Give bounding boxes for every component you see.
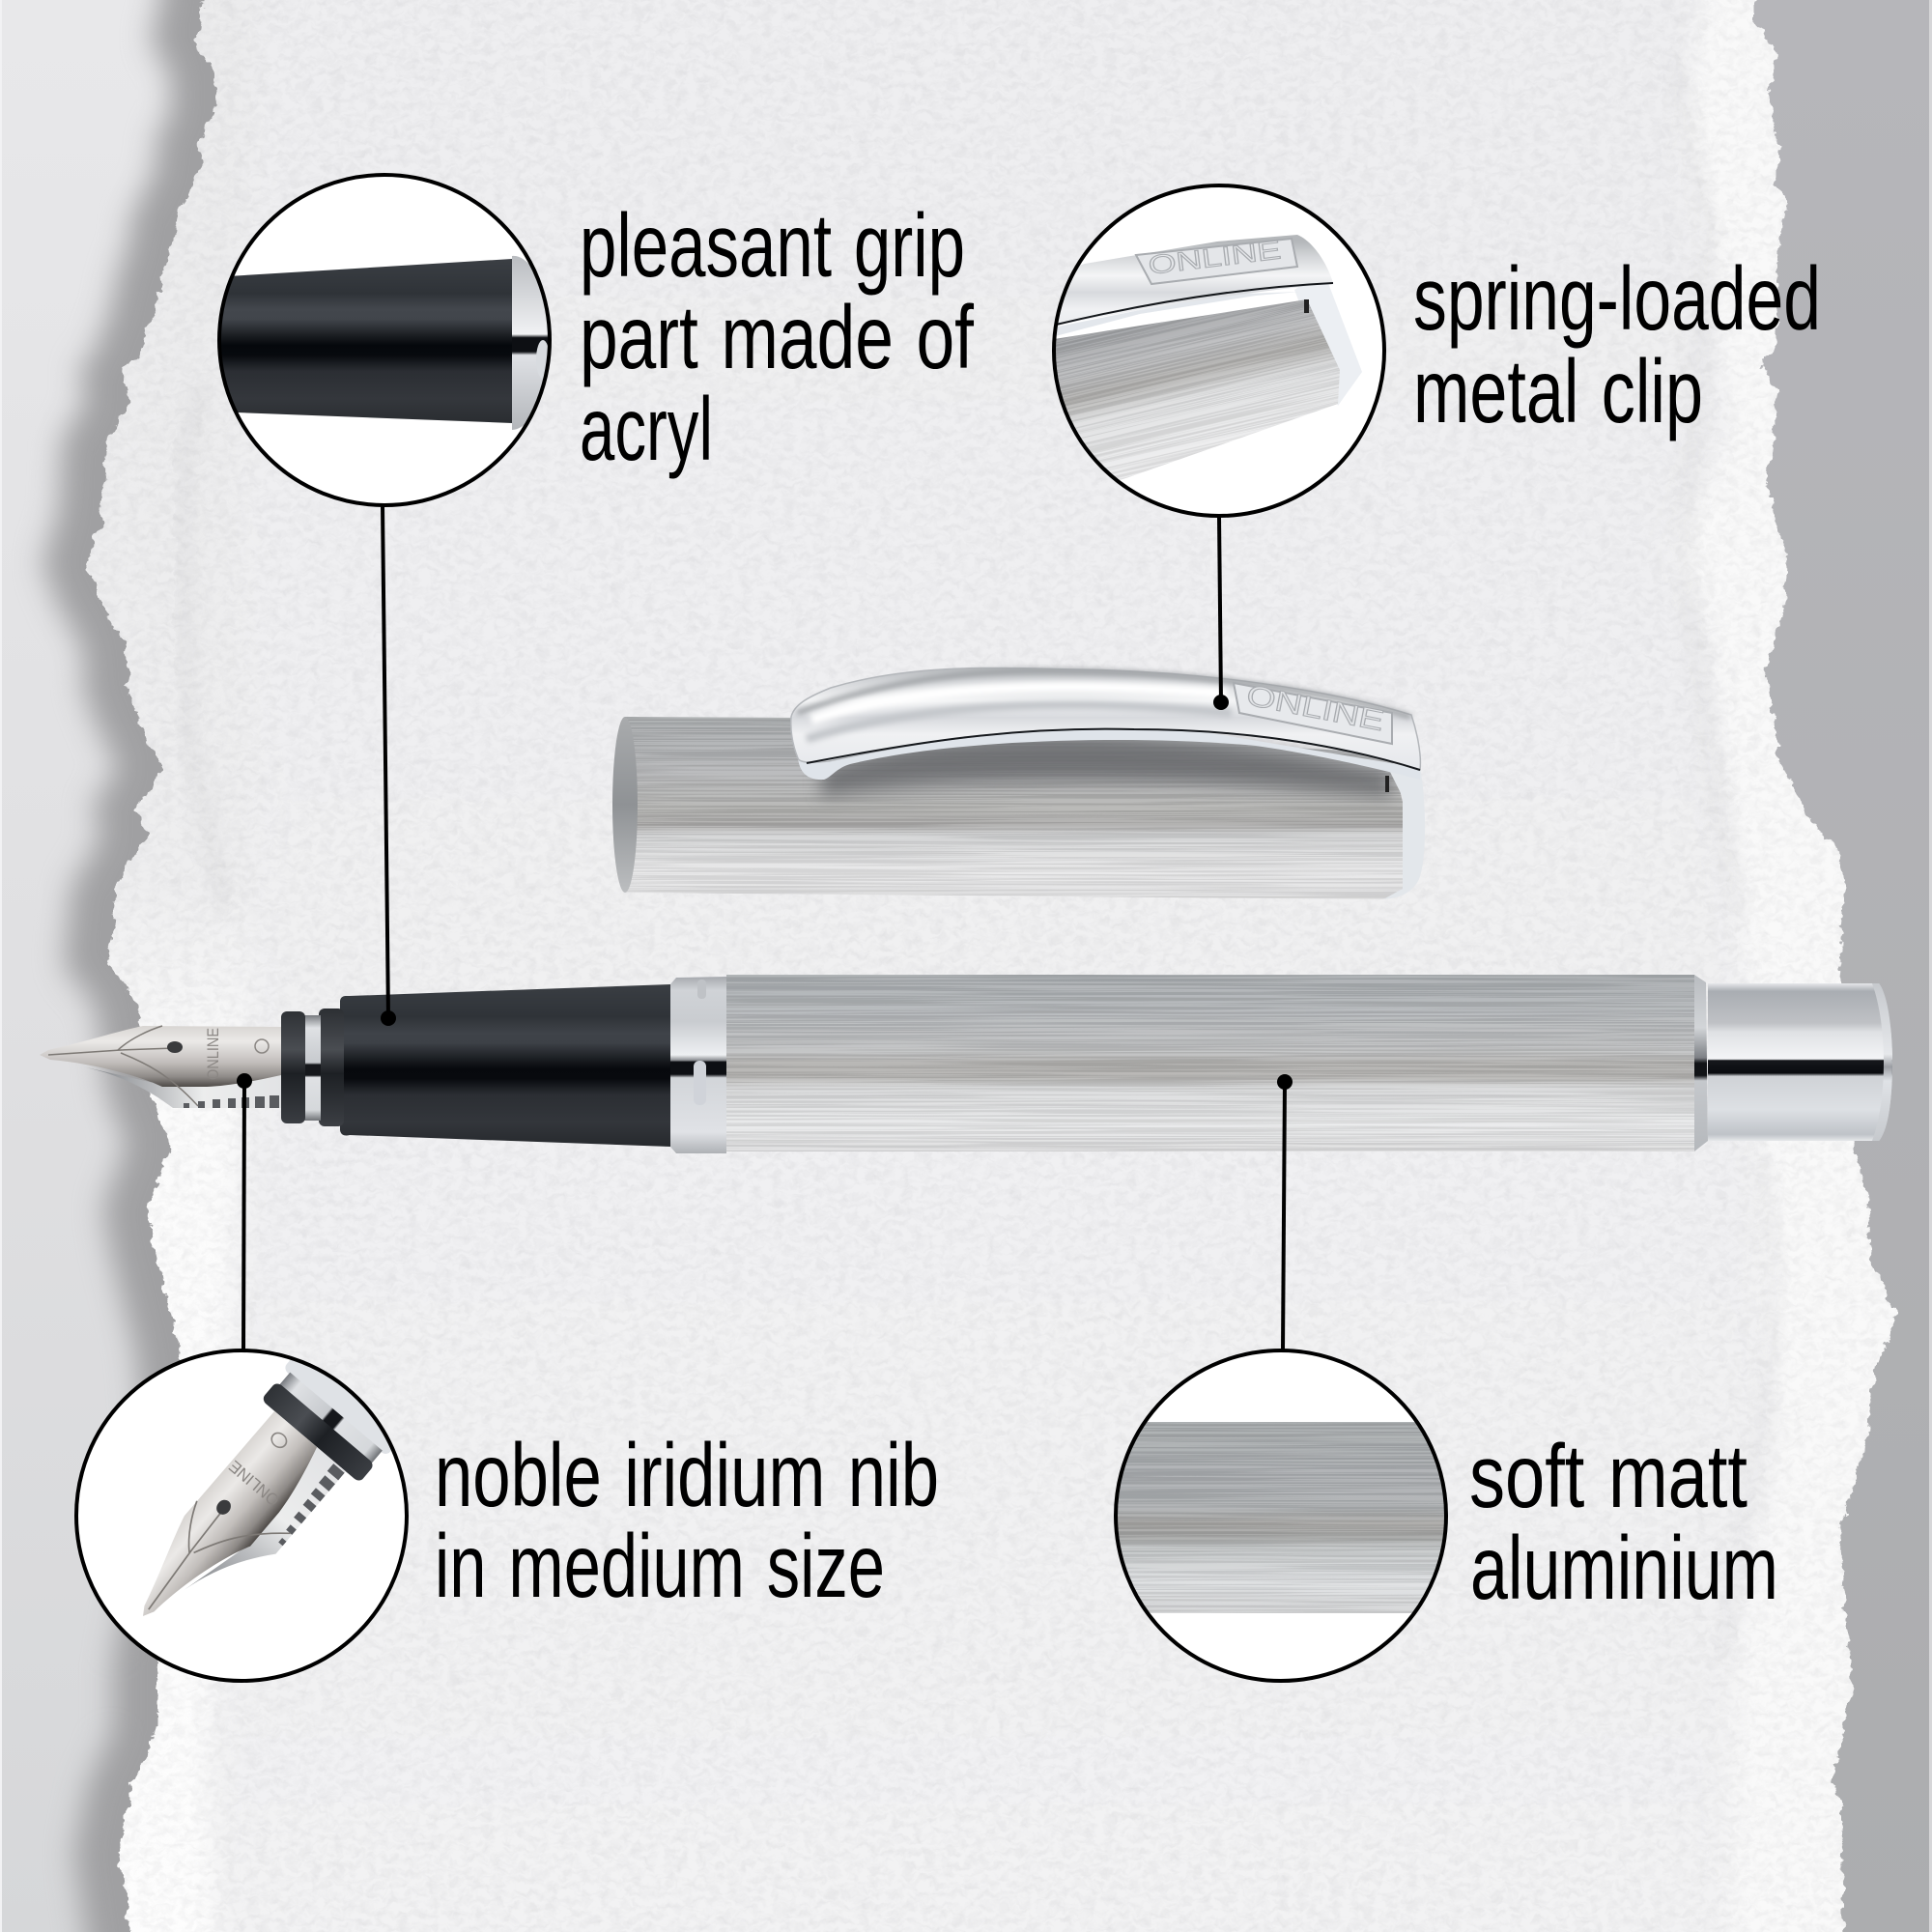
- engraved logo plate: [1234, 679, 1392, 744]
- detail image: clip: ONLINE: [1147, 235, 1283, 280]
- metal clip lip: [798, 724, 1420, 780]
- clip lower dark edge: [807, 729, 1420, 770]
- cap opening: [612, 717, 638, 893]
- circle base: [1116, 1350, 1446, 1681]
- end cap rim: [1872, 983, 1892, 1141]
- collar base: [281, 1011, 305, 1123]
- circle outline: [76, 1350, 407, 1681]
- label: grip: part made of: [580, 287, 974, 387]
- label: aluminium: [1469, 1426, 1778, 1618]
- clip catch: [1385, 776, 1389, 792]
- end ring: [1694, 975, 1708, 1151]
- aluminium barrel: [726, 975, 1694, 1151]
- leader dot: [1277, 1074, 1293, 1090]
- leader dot: [237, 1073, 252, 1089]
- dark collar: [319, 1009, 344, 1126]
- callout: nib: [76, 1073, 939, 1681]
- clip highlight: [811, 687, 1227, 720]
- label: grip: [580, 195, 974, 479]
- label: clip: metal clip: [1413, 341, 1703, 441]
- nib slit and lines: [48, 1026, 198, 1106]
- label: nib: noble iridium nib: [435, 1425, 939, 1525]
- circle outline: [1116, 1350, 1446, 1681]
- label: aluminium: soft matt: [1469, 1426, 1747, 1526]
- nib with collar: [40, 1009, 344, 1126]
- engraved logo plate: ONLINE: [1244, 679, 1386, 737]
- feed comb: [86, 1067, 281, 1108]
- fountain pen: [40, 975, 1892, 1153]
- nib blade: [40, 1026, 281, 1087]
- callout: metal clip: [1052, 184, 1816, 710]
- pen cap with clip: [612, 668, 1425, 899]
- grip section: [340, 984, 670, 1147]
- circle base: [1054, 185, 1384, 516]
- cap barrel: [625, 717, 1403, 899]
- end cap chrome: [1708, 983, 1892, 1141]
- circle outline: [1054, 185, 1384, 516]
- shadow of torn paper: [43, 0, 632, 1932]
- circle outline: [219, 175, 550, 505]
- detail image: nib: [143, 1360, 391, 1616]
- cap end piece: [1383, 768, 1425, 899]
- detail image: nib: ONLINE: [225, 1457, 283, 1510]
- label: nib: [435, 1425, 939, 1616]
- feed teeth: [184, 1095, 279, 1108]
- leader line: [1283, 1082, 1285, 1350]
- ring notch upper: [697, 980, 706, 999]
- leader line: [1219, 515, 1221, 702]
- circle base: [76, 1350, 407, 1681]
- detail image: clip: [1056, 235, 1362, 480]
- label: clip: [1413, 248, 1821, 441]
- label: nib: in medium size: [435, 1516, 885, 1616]
- shadow under clip: [821, 736, 1391, 797]
- chrome ring: [670, 977, 726, 1153]
- nib imprint: ONLINE: [204, 1028, 222, 1080]
- callout: aluminium: [1111, 1074, 1778, 1681]
- label: aluminium: aluminium: [1470, 1518, 1778, 1618]
- circle base: [219, 175, 550, 505]
- clip top edge shading: [797, 671, 1410, 717]
- metal clip: [791, 668, 1420, 770]
- callout: grip part: [213, 175, 974, 1026]
- label: grip: pleasant grip: [580, 195, 965, 296]
- label: grip: acryl: [580, 379, 713, 479]
- leader line: [243, 1081, 244, 1350]
- detail image: brushed aluminium: [1111, 1422, 1451, 1613]
- breather hole: [167, 1041, 183, 1053]
- leader line: [383, 505, 388, 1018]
- ring notch lower: [694, 1061, 706, 1105]
- leader dot: [381, 1010, 396, 1026]
- collar ring: [303, 1015, 321, 1121]
- nib emblem: [255, 1039, 269, 1053]
- clip mid shading: [807, 705, 1232, 739]
- detail image: grip: [213, 256, 553, 430]
- leader dot: [1213, 695, 1229, 710]
